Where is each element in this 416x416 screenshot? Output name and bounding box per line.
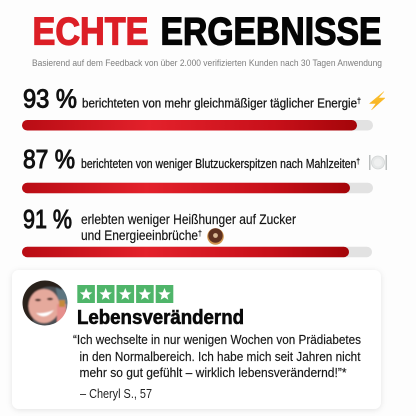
stat description: berichteten von weniger Blutzuckerspitzen nach Mahlzeiten bbox=[81, 156, 416, 171]
progress bar 91 bbox=[22, 247, 372, 257]
stat description: † bbox=[357, 96, 361, 106]
review quote: mehr so gut gefühlt – wirklich lebensverändernd!”* bbox=[80, 365, 346, 380]
avatar photo bbox=[22, 280, 68, 326]
title bbox=[32, 11, 382, 54]
stat description: † bbox=[198, 229, 202, 238]
title: ECHTE bbox=[32, 11, 148, 54]
icon: lightning bolt bbox=[370, 92, 385, 110]
stat description: berichteten von mehr gleichmäßiger täglicher Energie bbox=[82, 96, 391, 110]
stat description bbox=[81, 212, 296, 243]
star rating bbox=[77, 285, 173, 303]
stat value: 91 % bbox=[23, 206, 72, 234]
review quote: in den Normalbereich. Ich habe mich seit Jahren nicht bbox=[80, 349, 361, 364]
review heading: Lebensverändernd bbox=[77, 307, 244, 329]
review quote: “Ich wechselte in nur wenigen Wochen von Prädiabetes bbox=[73, 332, 361, 347]
stat: 91 % bbox=[22, 206, 372, 257]
stat description: erlebten weniger Heißhunger auf Zucker bbox=[81, 212, 296, 227]
stat value: 87 % bbox=[23, 146, 75, 174]
progress bar 93 bbox=[22, 120, 373, 130]
review author: – Cheryl S., 57 bbox=[80, 387, 152, 401]
stat description: † bbox=[356, 157, 360, 166]
progress bar 87 bbox=[22, 183, 373, 193]
stat: 93 % bbox=[22, 86, 385, 130]
icon: plate and cutlery bbox=[369, 155, 387, 170]
review quote bbox=[73, 332, 361, 380]
subtitle: Basierend auf dem Feedback von über 2.000 verifizierten Kunden nach 30 Tagen Anwendung bbox=[32, 58, 382, 69]
stat: 87 % bbox=[22, 146, 387, 193]
title: ERGEBNISSE bbox=[160, 11, 382, 54]
stat description: und Energieeinbrüche bbox=[81, 228, 213, 243]
panel: testimonial bbox=[12, 270, 381, 409]
icon: donut bbox=[207, 228, 224, 245]
stat value: 93 % bbox=[23, 86, 77, 114]
